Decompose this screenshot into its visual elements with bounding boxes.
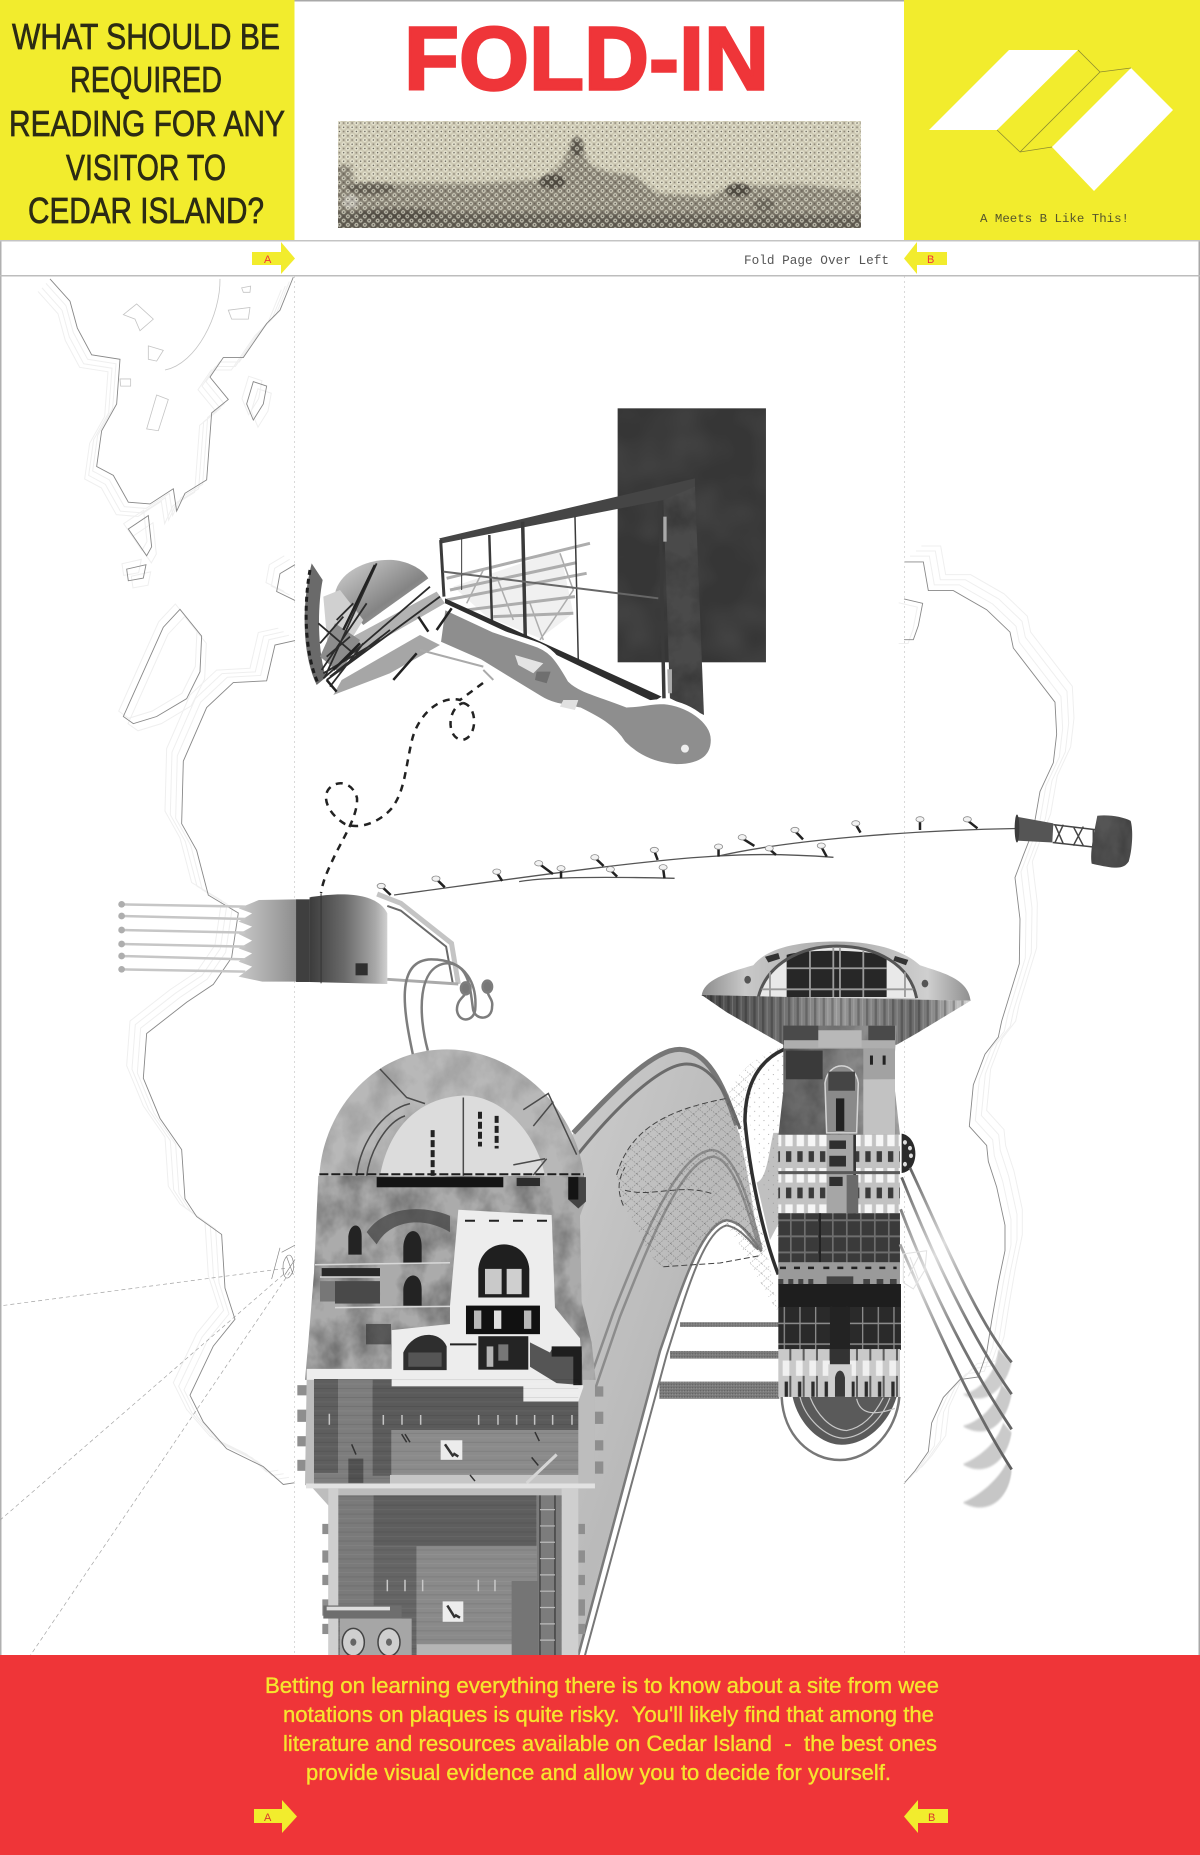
fins: [963, 1350, 1012, 1508]
dial ornament: [902, 1134, 915, 1173]
slope surface: [560, 1049, 762, 1655]
body text: notations on plaques is quite risky. You'll likely find that among the: [283, 1702, 934, 1727]
collage: arched slope: [543, 1047, 784, 1655]
body text: provide visual evidence and allow you to decide for yourself.: [306, 1760, 891, 1785]
masonry section: [305, 1176, 596, 1380]
header panel: question: [0, 0, 294, 240]
roof dome: [702, 941, 971, 1001]
body text: literature and resources available on Cedar Island - the best ones: [283, 1731, 937, 1756]
collage: door with hoses and oars: [118, 893, 492, 1055]
upper plank section: [314, 1379, 578, 1485]
body text: [265, 1673, 939, 1785]
header panel: fold diagram: [904, 0, 1200, 240]
arrow: A: A: [264, 254, 272, 266]
icon: folded page: [929, 50, 1173, 191]
heading: question text: READING FOR ANY: [9, 103, 285, 144]
arrow: A: A: [264, 1812, 272, 1824]
halftone photograph: [323, 121, 881, 242]
white cutaway with dark windows: [307, 1210, 583, 1401]
door arm: [377, 894, 458, 984]
lower plank section: [306, 1483, 595, 1656]
fold instruction text: Fold Page Over Left: [744, 254, 889, 268]
body text: Betting on learning everything there is to know about a site from wee: [265, 1673, 939, 1698]
mini-golf fairway: [438, 607, 713, 767]
fold instruction strip: [0, 240, 1200, 276]
collage: door, bleachers and mini-golf fairway: [305, 408, 766, 767]
heading: question text: REQUIRED: [70, 59, 222, 100]
connecting bars: [659, 1322, 779, 1399]
bleachers: [447, 543, 590, 640]
door body: [296, 893, 387, 984]
arrow: B: B: [928, 1812, 935, 1824]
roof band: [702, 995, 971, 1045]
hoses: [405, 959, 492, 1055]
door frame and window: [439, 478, 704, 715]
thick cable: [745, 1049, 784, 1274]
footer panel: [0, 1655, 1200, 1855]
arrow: B: [904, 242, 947, 274]
tower bowl: [782, 1397, 899, 1460]
arrow: A: [254, 1800, 297, 1833]
oars: [118, 899, 296, 982]
collage: composite tower: [702, 941, 971, 1460]
dome section: [319, 1049, 584, 1176]
heading: question text: VISITOR TO: [66, 147, 226, 188]
heading: question text: [9, 16, 285, 231]
heading: question text: CEDAR ISLAND?: [28, 190, 264, 231]
gatehouse: [778, 1026, 900, 1137]
arrow: B: [904, 1800, 948, 1833]
map: right coast: [899, 546, 1074, 1484]
dotted net: [747, 1047, 784, 1267]
map: left coast: [0, 277, 295, 1656]
dashed trail: [321, 683, 483, 893]
cables: [900, 1168, 1012, 1469]
cannon: [323, 1605, 412, 1656]
buoy: [1015, 814, 1132, 868]
collage: lamp wire and buoy: [377, 817, 1026, 895]
arrow: B: B: [927, 254, 934, 266]
lower section base: [297, 1379, 603, 1656]
faint rosette: [903, 1251, 927, 1289]
facade tiers: [778, 1135, 901, 1397]
map: island coastline with contour lines and sight lines: [0, 277, 1074, 1656]
wire net: [617, 1047, 783, 1313]
caption: fold diagram: A Meets B Like This!: [980, 212, 1129, 226]
heading: question text: WHAT SHOULD BE: [12, 16, 280, 57]
small fin: [757, 1133, 780, 1240]
arrow: A: [252, 242, 295, 274]
lamp branches: [394, 828, 1026, 895]
collage: cables and fins: [900, 1168, 1012, 1508]
lamps: [377, 817, 977, 895]
fold guide lines: [294, 276, 904, 1656]
slope stripes: [543, 1049, 762, 1655]
spherical collage fragment: [305, 560, 493, 695]
dark cloudy panel: [618, 408, 766, 662]
title: FOLD-IN: [404, 10, 769, 110]
collage: fort section: [297, 1049, 603, 1656]
